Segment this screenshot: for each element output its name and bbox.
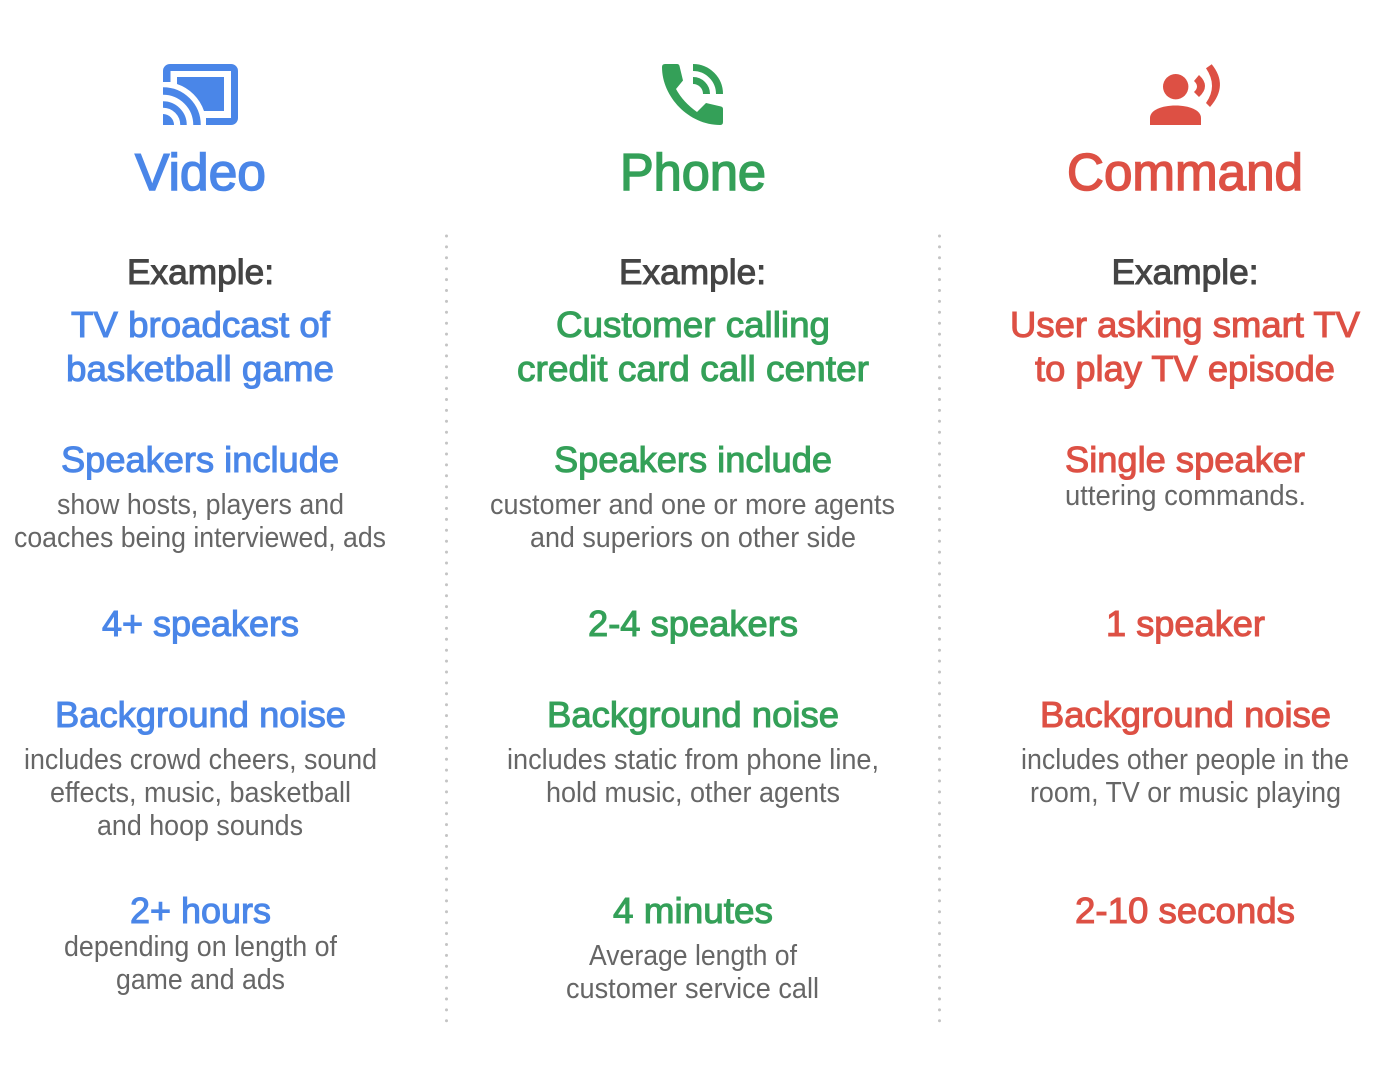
text: duration description: game and ads: [116, 964, 285, 996]
text: noise description: and hoop sounds: [97, 810, 303, 842]
example text: Customer calling: [556, 304, 830, 345]
icon: cast to screen: [163, 64, 238, 125]
example text: TV broadcast of: [71, 304, 331, 345]
text: noise description: includes other people in the: [1021, 744, 1349, 776]
panel: video column: [14, 64, 386, 996]
example text: [66, 304, 334, 389]
heading: single speaker: Single speaker: [1065, 439, 1305, 480]
icon: phone call: [662, 64, 723, 125]
text: duration description: customer service call: [566, 973, 819, 1005]
text: duration description: [566, 940, 819, 1005]
text: noise description: effects, music, basketball: [50, 777, 351, 809]
text: noise description: room, TV or music playing: [1030, 777, 1341, 809]
example text: [1010, 304, 1360, 389]
text: speakers description: show hosts, players and: [57, 489, 344, 521]
heading: speakers include: Speakers include: [61, 439, 339, 480]
stat: duration: 4 minutes: [613, 890, 773, 931]
text: noise description: [507, 744, 879, 809]
example text: [517, 304, 869, 389]
stat: duration: 2-10 seconds: [1075, 890, 1295, 931]
text: speakers description: and superiors on other side: [530, 522, 856, 554]
text: duration description: depending on length of: [64, 931, 338, 963]
heading: background noise: Background noise: [547, 694, 839, 735]
text: duration description: [64, 931, 338, 996]
example text: credit card call center: [517, 348, 869, 389]
stat: speaker count: 2-4 speakers: [588, 603, 798, 644]
heading: speakers include: Speakers include: [554, 439, 832, 480]
text: noise description: [1021, 744, 1349, 809]
stat: duration: 2+ hours: [130, 890, 271, 931]
title: Phone: Phone: [620, 144, 766, 202]
title: Video: Video: [135, 144, 266, 202]
example label: Example:: [1112, 253, 1258, 292]
heading: background noise: Background noise: [55, 694, 346, 735]
example label: Example:: [619, 253, 766, 292]
example label: Example:: [127, 253, 274, 292]
text: speakers description: [14, 489, 386, 554]
text: noise description: includes static from phone line,: [507, 744, 879, 776]
stat: speaker count: 4+ speakers: [102, 603, 299, 644]
text: speakers description: coaches being interviewed, ads: [14, 522, 386, 554]
panel: command column: [1010, 64, 1360, 931]
text: speaker description: uttering commands.: [1065, 480, 1306, 512]
stat: speaker count: 1 speaker: [1106, 603, 1265, 644]
text: noise description: includes crowd cheers, sound: [24, 744, 377, 776]
text: duration description: Average length of: [589, 940, 798, 972]
icon: person speaking: [1150, 64, 1220, 125]
text: speakers description: customer and one or more agents: [490, 489, 895, 521]
text: noise description: [24, 744, 377, 842]
text: speakers description: [490, 489, 895, 554]
title: Command: Command: [1067, 144, 1303, 202]
text: noise description: hold music, other agents: [546, 777, 840, 809]
example text: User asking smart TV: [1010, 304, 1360, 345]
panel: phone column: [490, 64, 895, 1005]
example text: basketball game: [66, 348, 334, 389]
example text: to play TV episode: [1035, 348, 1335, 389]
heading: background noise: Background noise: [1040, 694, 1331, 735]
